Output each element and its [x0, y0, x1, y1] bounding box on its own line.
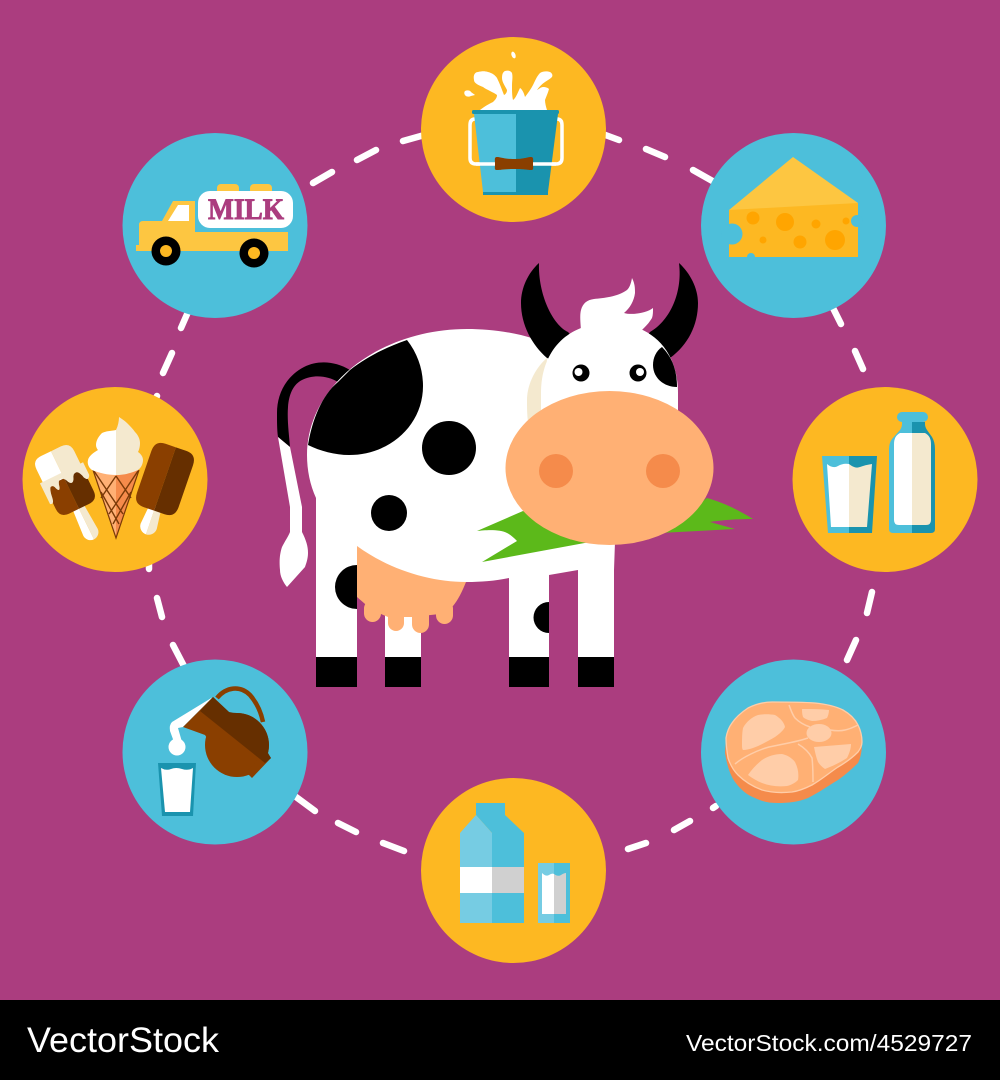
cow head	[527, 278, 678, 470]
cow body and legs	[307, 329, 620, 687]
cow muzzle	[506, 391, 714, 545]
icon: milk pitcher and glass	[122, 660, 308, 844]
icon: milk bottle and glass	[792, 387, 978, 572]
left popsicle	[29, 441, 116, 550]
icon: milk carton and glass	[421, 778, 606, 963]
icon: milk bucket	[421, 37, 606, 222]
cow udder	[357, 546, 466, 633]
icon: milk truck: MILK	[208, 193, 285, 226]
icon: ice creams	[22, 387, 208, 572]
icon: milk truck	[122, 133, 308, 318]
ice cream cone	[88, 417, 143, 538]
cow spots	[335, 421, 549, 633]
icon: steak	[701, 660, 886, 844]
cow tail	[277, 362, 350, 587]
cow horns	[521, 263, 698, 370]
footer bar: VectorStock.com/4529727	[686, 1030, 972, 1056]
footer bar	[0, 1000, 1000, 1080]
cow black patch	[308, 340, 423, 455]
footer bar: VectorStock	[27, 1021, 220, 1060]
right popsicle	[125, 440, 197, 541]
icon: cheese wedge	[701, 133, 886, 318]
cow	[277, 263, 753, 687]
dashed ring connecting the product circles	[149, 133, 872, 851]
grass in mouth	[477, 498, 753, 562]
